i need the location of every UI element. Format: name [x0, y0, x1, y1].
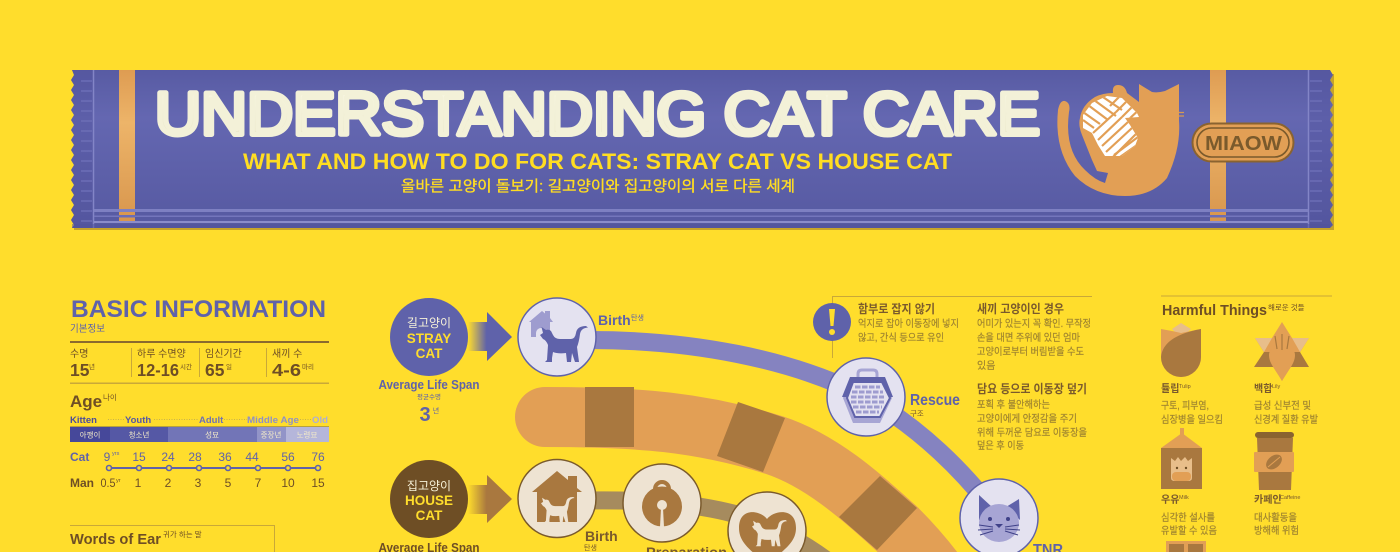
age conversion timeline: 15 — [132, 450, 146, 464]
house cat badge: HOUSE — [405, 493, 453, 508]
item: caffeine: 카페인 — [1254, 493, 1282, 506]
stat: lifespan — [70, 348, 95, 380]
heading: age: 나이 — [103, 392, 117, 402]
label: rescue — [910, 392, 960, 418]
item: tulip: 구토, 피부염, — [1161, 400, 1209, 412]
age conversion timeline: yrs — [112, 451, 120, 457]
tip: kitten: 새끼 고양이인 경우 — [977, 301, 1064, 316]
stat: sleep — [137, 347, 192, 380]
item: tulip: 심장병을 일으킴 — [1161, 414, 1223, 426]
subtitle korean: 올바른 고양이 돌보기: 길고양이와 집고양이의 서로 다른 세계 — [401, 178, 795, 195]
tip: do not grab: 함부로 잡지 않기 — [858, 301, 935, 316]
age conversion timeline: 2 — [165, 476, 172, 490]
label: rescue: Rescue — [910, 392, 960, 409]
age stage labels: Old — [312, 415, 328, 426]
item: caffeine: 대사활동을 — [1254, 511, 1297, 524]
tip: kitten — [977, 301, 1091, 372]
stray cat life span: 평균수명 — [417, 392, 441, 401]
house cat badge: CAT — [416, 508, 443, 523]
item: milk: 유발할 수 있음 — [1161, 525, 1217, 537]
house cat badge — [390, 460, 468, 538]
item: tulip: Tulip — [1179, 384, 1191, 390]
item: milk: Milk — [1179, 495, 1189, 501]
stat: gestation: 임신기간 — [205, 347, 242, 360]
age stage labels — [70, 415, 328, 426]
age stage bar: 중장년 — [261, 430, 281, 440]
tip: kitten: 있음 — [977, 360, 995, 372]
icon: tnr cat — [960, 479, 1038, 552]
heading: age — [70, 392, 117, 411]
heading korean: 기본정보 — [70, 323, 105, 335]
stat: litter: 새끼 수 — [272, 348, 302, 360]
icon: warning — [813, 303, 851, 341]
age conversion timeline: 0.5 — [100, 476, 116, 490]
stray cat badge — [390, 298, 468, 376]
age stage bar: 청소년 — [129, 430, 149, 440]
heading: basic information: BASIC INFORMATION — [71, 296, 326, 323]
subtitle english: WHAT AND HOW TO DO FOR CATS: STRAY CAT VS HOUSE CAT — [243, 149, 953, 174]
panel: words of ear — [70, 526, 274, 552]
stat: gestation — [205, 347, 242, 380]
stray cat badge: STRAY — [407, 331, 451, 346]
stat: litter: 마리 — [302, 362, 314, 371]
arrow: house cat — [468, 475, 512, 523]
age stage bar: 아깽이 — [80, 430, 100, 440]
label: birth house: 탄생 — [584, 543, 597, 552]
item: milk: 심각한 설사를 — [1161, 512, 1215, 524]
icon: rescue carrier — [827, 358, 905, 436]
stat: sleep: 시간 — [180, 362, 192, 371]
tip: kitten: 손을 대면 주위에 있던 엄마 — [977, 331, 1080, 344]
label: birth stray: Birth — [598, 312, 631, 328]
age stage labels: Adult — [199, 415, 224, 426]
tip: blanket: 담요 등으로 이동장 덮기 — [977, 381, 1087, 396]
label: birth house — [584, 528, 618, 552]
tip: blanket — [977, 381, 1087, 452]
item: milk — [1161, 428, 1217, 537]
age conversion timeline: 24 — [161, 450, 175, 464]
age stage bar: 노령묘 — [297, 430, 317, 440]
stray cat life span: Average Life Span — [378, 378, 480, 392]
age conversion timeline: 1 — [135, 476, 142, 490]
item: caffeine — [1254, 432, 1300, 537]
age stage labels: Kitten — [70, 415, 97, 426]
item: chocolate — [1166, 541, 1206, 552]
tip: do not grab: 억지로 잡아 이동장에 넣지 — [858, 318, 959, 330]
chart: life path and cat tail — [545, 340, 999, 552]
tip: blanket: 고양이에게 안정감을 주기 — [977, 413, 1077, 425]
age conversion timeline: 9 — [104, 450, 111, 464]
item: lily: Lily — [1272, 384, 1281, 390]
panel: words of ear: 귀가 하는 말 — [163, 529, 202, 539]
house cat badge: 집고양이 — [407, 479, 451, 493]
item: caffeine: Caffeine — [1280, 495, 1300, 501]
item: tulip: 튤립 — [1161, 382, 1179, 395]
icon: birth house — [518, 460, 596, 538]
badge: MIAOW: MIAOW — [1205, 133, 1282, 155]
age conversion timeline: 56 — [281, 450, 295, 464]
age conversion timeline: 7 — [255, 476, 262, 490]
badge: MIAOW — [1192, 124, 1294, 162]
tip: do not grab — [858, 301, 959, 344]
item: caffeine: 방해해 위험 — [1254, 524, 1299, 537]
panel: harmful things — [1161, 296, 1332, 552]
heading: harmful things: Harmful Things — [1162, 303, 1267, 319]
stray cat life span: 3 — [419, 404, 431, 426]
icon: cat with yarn ball — [1057, 84, 1184, 196]
label: birth house: Birth — [585, 528, 618, 544]
item: lily — [1254, 322, 1318, 426]
panel: words of ear: Words of Ear — [70, 532, 161, 548]
stat: gestation: 일 — [226, 362, 232, 371]
tip: kitten: 어미가 있는지 꼭 확인. 무작정 — [977, 318, 1091, 330]
arrow: stray cat — [468, 312, 512, 361]
age conversion timeline: Cat — [70, 450, 89, 464]
stat: lifespan: 수명 — [70, 348, 88, 360]
heading: age: Age — [70, 392, 102, 411]
tip: blanket: 위해 두꺼운 담요로 이동장을 — [977, 426, 1087, 439]
age conversion timeline: Man — [70, 476, 94, 490]
panel: basic information — [70, 296, 329, 490]
age conversion timeline: 15 — [311, 476, 325, 490]
cat tail road — [545, 387, 942, 552]
stat: lifespan: 년 — [89, 362, 95, 371]
stray cat life span: 년 — [433, 406, 439, 415]
age conversion timeline: 10 — [281, 476, 295, 490]
stat: sleep: 12-16 — [137, 360, 179, 380]
label: rescue: 구조 — [910, 409, 924, 418]
stat: lifespan: 15 — [70, 360, 90, 380]
infographic canvas — [70, 70, 1334, 552]
age stage bar — [70, 426, 329, 442]
age conversion timeline: 76 — [311, 450, 325, 464]
age conversion timeline: 5 — [225, 476, 232, 490]
stray cat badge: CAT — [416, 346, 443, 361]
stray cat badge: 길고양이 — [407, 316, 451, 330]
age conversion timeline: 36 — [218, 450, 232, 464]
stat: litter — [272, 348, 314, 380]
age conversion timeline: 3 — [195, 476, 202, 490]
age conversion timeline: 44 — [245, 450, 259, 464]
age stage labels: Youth — [125, 415, 151, 426]
title: UNDERSTANDING CAT CARE — [155, 80, 1040, 148]
tip: kitten: 고양이로부터 버림받을 수도 — [977, 346, 1084, 358]
item: milk: 우유 — [1161, 494, 1179, 506]
tip: do not grab: 않고, 간식 등으로 유인 — [858, 332, 944, 344]
banner: cat treat packet — [71, 70, 1334, 230]
tip: blanket: 포획 후 불안해하는 — [977, 398, 1050, 411]
stat: litter: 4-6 — [272, 360, 301, 380]
icon: preparation bell — [623, 464, 701, 542]
item: lily: 백합 — [1254, 382, 1272, 395]
stray cat path — [590, 340, 999, 518]
heading: harmful things: 해로운 것들 — [1268, 302, 1305, 312]
item: tulip — [1161, 323, 1223, 426]
age conversion timeline — [70, 450, 325, 490]
label: birth stray: 탄생 — [631, 313, 644, 322]
age conversion timeline: yr — [116, 478, 121, 484]
age conversion timeline: 28 — [188, 450, 202, 464]
age stage labels: Middle Age — [247, 415, 299, 426]
age stage bar: 성묘 — [205, 430, 219, 440]
icon: heart cat — [728, 492, 806, 552]
stat: gestation: 65 — [205, 360, 225, 380]
item: lily: 급성 신부전 및 — [1254, 400, 1311, 412]
item: lily: 신경계 질환 유발 — [1254, 413, 1318, 426]
icon: birth stray — [518, 298, 596, 376]
callout: handling tips — [813, 296, 1092, 452]
stat: sleep: 하루 수면양 — [137, 347, 186, 360]
tip: blanket: 덮은 후 이동 — [977, 440, 1024, 452]
house cat path — [590, 500, 845, 552]
stray cat life span — [378, 378, 480, 426]
